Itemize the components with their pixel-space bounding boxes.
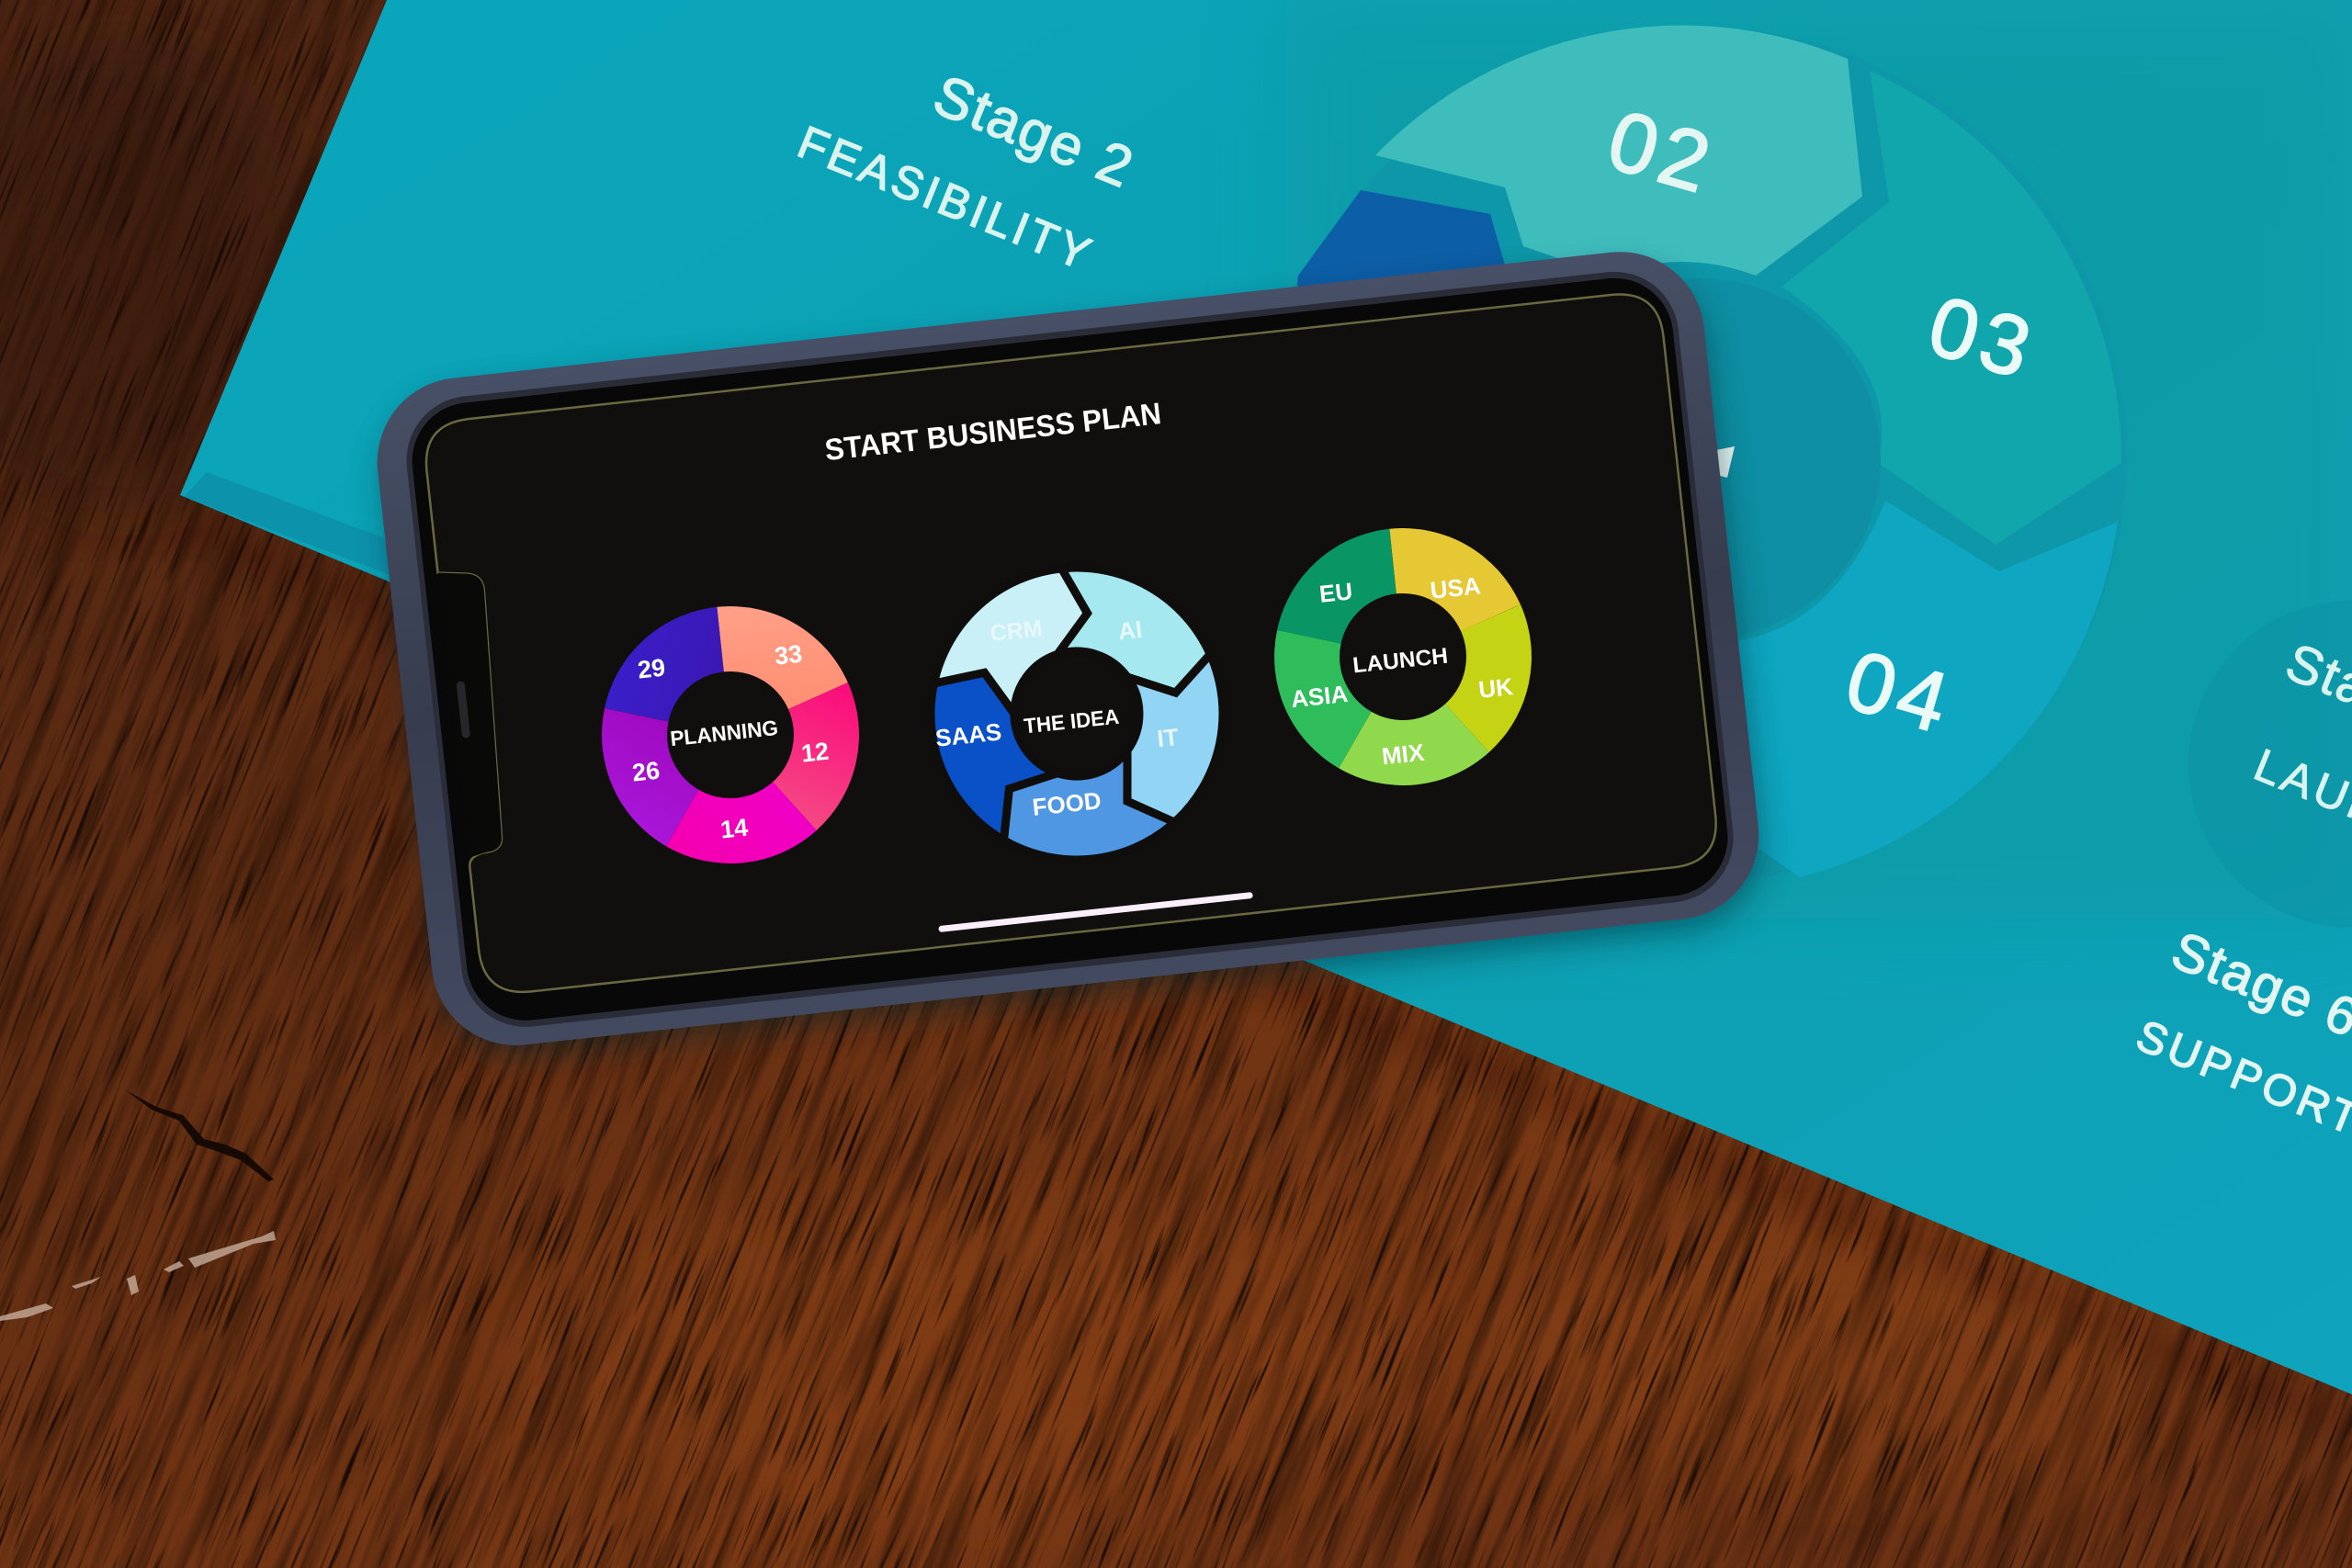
segment 33 — [717, 594, 850, 716]
pale scratch — [0, 1231, 276, 1321]
planning labels: 26 — [631, 757, 662, 787]
planning labels — [631, 640, 831, 844]
dark scratch — [126, 1090, 274, 1181]
segment MIX — [1325, 671, 1489, 834]
launch labels: ASIA — [1290, 680, 1350, 713]
segment 04 — [1709, 501, 2118, 877]
segment SAAS — [884, 653, 1082, 847]
segment 29 — [605, 589, 737, 731]
idea labels: SAAS — [934, 717, 1003, 752]
idea labels: IT — [1156, 723, 1180, 752]
number 03: 03 — [1918, 278, 2046, 398]
segment USA — [1389, 516, 1522, 637]
number 02: 02 — [1598, 93, 1725, 212]
segment ASIA — [1233, 613, 1393, 768]
home indicator — [938, 892, 1253, 932]
segment 03 — [1781, 71, 2121, 545]
segment 02 — [1375, 26, 1862, 276]
earpiece speaker — [456, 681, 470, 739]
idea labels: AI — [1117, 615, 1144, 645]
planning labels: 14 — [719, 814, 750, 844]
idea labels — [934, 615, 1180, 821]
screen title: START BUSINESS PLAN — [823, 396, 1163, 467]
segment FOOD — [980, 713, 1184, 915]
segment CRM — [932, 547, 1095, 724]
launch labels: USA — [1429, 571, 1482, 604]
planning labels: 29 — [637, 654, 667, 684]
number 04: 04 — [1836, 633, 1963, 752]
segment 14 — [652, 750, 817, 912]
stage 2 caption — [791, 63, 1143, 281]
idea labels: FOOD — [1031, 786, 1102, 821]
notch cut-out — [438, 568, 513, 858]
segment EU — [1277, 511, 1409, 653]
paper poster shadow — [170, 514, 2352, 1433]
launch labels — [1290, 571, 1515, 770]
segment 26 — [560, 691, 720, 846]
launch labels: EU — [1318, 577, 1354, 608]
wheel backing ring — [1272, 28, 2127, 882]
fragment of hub label — [1716, 446, 1735, 478]
stage 5 caption — [2247, 632, 2352, 865]
glass edge with notch — [422, 289, 1721, 997]
phone drop shadow — [377, 263, 1769, 1064]
phone screen — [422, 289, 1721, 997]
idea labels: CRM — [989, 615, 1044, 647]
launch labels: LAUNCH — [1351, 644, 1449, 678]
planning labels: 12 — [800, 738, 831, 768]
segment IT — [1081, 642, 1267, 836]
donut chart: launch — [1213, 485, 1580, 850]
segment 01 — [1297, 190, 1505, 287]
stage 2 caption: Stage 2 — [925, 63, 1143, 200]
launch labels: UK — [1477, 672, 1515, 704]
planning labels: PLANNING — [669, 716, 779, 750]
segment AI — [1048, 554, 1214, 705]
segment 12 — [748, 682, 898, 839]
phone bezel — [406, 272, 1734, 1026]
segment UK — [1420, 604, 1570, 761]
idea labels: THE IDEA — [1023, 705, 1120, 738]
stage 2 caption: FEASIBILITY — [791, 116, 1101, 281]
phone case inner lip — [400, 265, 1740, 1033]
stage 6 caption — [2130, 920, 2352, 1145]
phone case — [368, 243, 1768, 1054]
planning labels: 33 — [774, 640, 804, 671]
process wheel on poster — [1268, 26, 2127, 882]
launch labels: MIX — [1381, 739, 1426, 770]
donut chart: planning — [540, 563, 908, 928]
phone — [368, 243, 1768, 1054]
donut chart: the idea — [861, 518, 1279, 933]
wheel hub — [1717, 279, 1881, 627]
